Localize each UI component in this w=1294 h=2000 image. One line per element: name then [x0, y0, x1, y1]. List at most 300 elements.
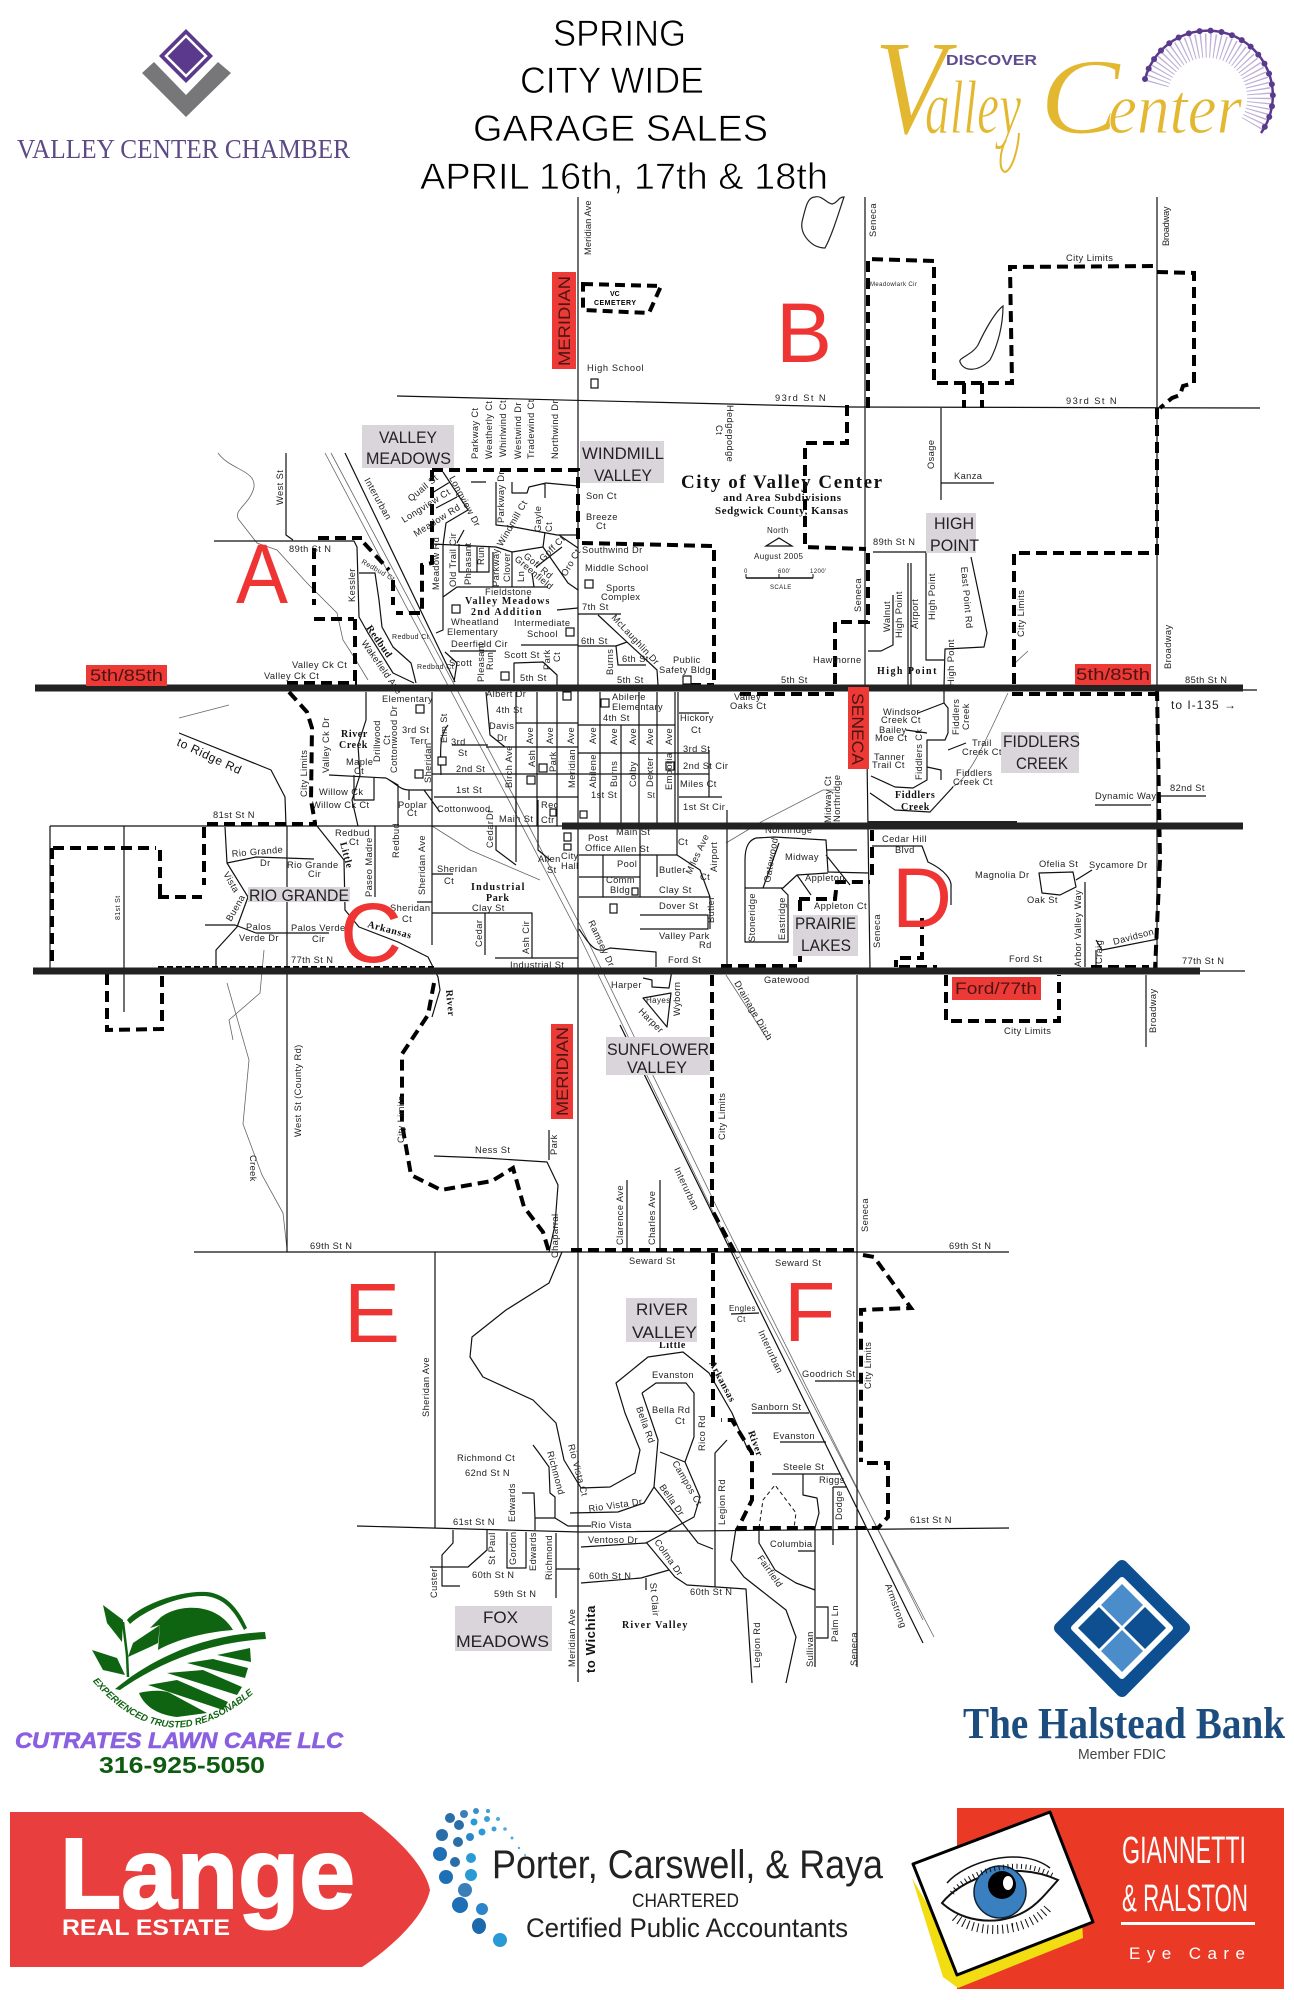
map: street labels downtown: 1st St Cir: [683, 802, 725, 812]
map: street labels east side: Trail Ct: [872, 760, 905, 770]
map: street labels downtown: Allen: [538, 854, 561, 864]
map: street labels east side: Blvd: [895, 845, 915, 855]
map: school and building icons: [415, 379, 691, 913]
map: street labels east side: Harper: [611, 980, 642, 990]
map: thick avenues: [33, 688, 1243, 971]
map: street labels east side: Wyborn: [672, 982, 682, 1016]
map: street labels east side: Creek Ct: [962, 747, 1002, 757]
map: street labels east side: Hayes: [646, 996, 671, 1005]
map: street labels south: Fairfield: [755, 1553, 785, 1589]
map: street labels south: Ct: [737, 1315, 746, 1324]
map: street labels south: 60th St N: [690, 1587, 732, 1597]
map: street labels rio grande area: Palos Verde: [291, 923, 346, 933]
map: street labels east side: Dynamic Way: [1095, 791, 1156, 801]
map: street labels downtown: Colby: [628, 761, 638, 787]
map: street labels downtown: Ford St: [668, 955, 701, 965]
map: street labels valley meadows and windmill: Middle School: [585, 563, 649, 573]
map heading: City of Valley Center: [681, 472, 883, 517]
map: street labels rio grande area: 81st St: [115, 895, 122, 920]
label: RIVER VALLEY: VALLEY: [632, 1323, 697, 1342]
map: north arrow and scale: August 2005: [754, 552, 803, 561]
logo: CutRates Lawn Care: EXPERIENCED TRUSTED REASONABLE: [92, 1678, 253, 1728]
map: street labels rio grande area: Clay St: [472, 903, 505, 913]
map: street labels valley meadows and windmill: 89th St N: [289, 544, 331, 554]
logo: Porter, Carswell, & Raya: CHARTERED: [632, 1891, 739, 1912]
logo: Valley Center Chamber: VALLEY CENTER CHAMBER: [17, 134, 350, 164]
map: street labels downtown: Ct: [678, 837, 688, 847]
map: street labels south: Legion Rd: [752, 1622, 762, 1668]
map: north arrow and scale: SCALE: [770, 585, 792, 591]
map: street labels rio grande area: Ash Cir: [521, 921, 531, 954]
map: street labels downtown: 4th St: [603, 713, 630, 723]
map: street labels south: Gordon: [508, 1532, 518, 1565]
map: street labels east side: Northridge: [765, 825, 812, 835]
map: street labels rio grande area: [115, 810, 564, 970]
map: street labels downtown: Willow Ck: [319, 787, 363, 797]
map: street labels downtown: Dover St: [659, 901, 698, 911]
section letter B: B: [776, 286, 832, 380]
map: street labels downtown: Elementary: [382, 694, 433, 704]
map: street labels downtown: Dr: [497, 733, 508, 743]
map: street labels east side: Appleton Ct: [814, 901, 867, 911]
map: street labels valley meadows and windmill: McLaughlin Dr: [610, 613, 661, 667]
map: street labels downtown: Main St: [616, 827, 650, 837]
map: street labels valley meadows and windmill: Kessler: [347, 568, 357, 602]
label: VALLEY MEADOWS: [362, 425, 454, 468]
map heading: City of Valley Center: City of Valley Center: [681, 472, 883, 493]
map: north arrow and scale: 1200': [810, 569, 826, 575]
map: street labels valley meadows and windmill: Tradewind Ct: [526, 399, 536, 459]
map: bold place names: River: [341, 729, 368, 740]
map: street labels downtown: Miles Ct: [680, 779, 717, 789]
map: street labels valley meadows and windmill: 7th St: [582, 602, 609, 612]
map: street labels valley meadows and windmill: Westwind Dr: [513, 402, 523, 459]
label: HIGH POINT: HIGH: [934, 514, 974, 533]
map: street labels downtown: Ave: [664, 728, 674, 745]
map: street labels north: 85th St N: [1185, 675, 1227, 685]
map: street labels south: Bella Rd: [634, 1405, 657, 1445]
map: street labels downtown: Sheridan: [423, 743, 433, 783]
map: street labels downtown: Ave: [545, 727, 555, 744]
map: street labels south: Interurban: [756, 1329, 785, 1375]
map: street labels south: Campos Ct: [670, 1459, 704, 1507]
map: bold place names: Arkansas: [706, 1359, 737, 1404]
map: road network: [50, 197, 1260, 1683]
section letter A: A: [236, 527, 288, 621]
map: street labels rio grande area: Vista: [221, 870, 241, 895]
logo: Discover Valley Center: DISCOVER: [946, 52, 1037, 69]
map: street labels rio grande area: Sheridan: [390, 903, 430, 913]
map: street labels valley meadows and windmill: Parkway Dr: [496, 471, 506, 523]
map: street labels rio grande area: Ct: [402, 914, 412, 924]
map: street labels downtown: 3rd: [451, 737, 466, 747]
map: street labels east side: Tanner: [874, 752, 905, 762]
logo: CutRates Lawn Care: [15, 1592, 344, 1778]
map: bold place names: Fiddlers: [895, 790, 935, 801]
map: street labels valley meadows and windmill: Parkway: [491, 549, 501, 587]
map: street labels south: 60th St N: [589, 1571, 631, 1581]
map: street labels downtown: Ct: [700, 872, 710, 882]
label: VALLEY MEADOWS: MEADOWS: [366, 449, 451, 468]
map: street labels downtown: Drillwood: [372, 720, 382, 762]
logo: Discover Valley Center: alley: [925, 66, 1021, 150]
logo: Giannetti & Ralston Eye Care: [912, 1808, 1284, 1989]
map: street labels downtown: Hickory: [680, 713, 714, 723]
map: street labels south: Evanston: [773, 1431, 815, 1441]
street tag: Meridian north: [552, 272, 576, 369]
map: street labels north: Walnut: [882, 601, 892, 632]
map: street labels south: Steele St: [783, 1462, 824, 1472]
map: street labels valley meadows and windmill: Windmill Ct: [495, 498, 529, 548]
map: street labels north: 93rd St N: [1066, 396, 1117, 406]
map: street labels north: Hawthorne: [813, 655, 862, 665]
map: street labels east side: Creek: [961, 703, 971, 730]
map: street labels east side: Moe Ct: [875, 733, 907, 743]
label: WINDMILL VALLEY: [580, 441, 664, 485]
map: street labels downtown: Butler: [659, 865, 686, 875]
map: street labels north: Seneca: [868, 203, 878, 237]
map: street labels north: Hedgepodge: [725, 405, 735, 462]
label: FOX MEADOWS: FOX: [483, 1608, 518, 1627]
map: street labels east side: Midway: [785, 852, 819, 862]
map: bold place names: to Wichita: [583, 1605, 598, 1673]
map: street labels downtown: City: [561, 851, 579, 861]
map: street labels east side: Gatewood: [764, 975, 810, 985]
map: street labels east side: Fiddlers Ck: [914, 729, 924, 780]
map: street labels downtown: Rd: [699, 940, 712, 950]
map: street labels south: Colma Dr: [652, 1537, 685, 1578]
logo: Discover Valley Center: enter: [1108, 69, 1243, 149]
map: street labels valley meadows and windmill: Safety Bldg: [659, 665, 711, 675]
map: street labels downtown: Poplar: [398, 800, 427, 810]
map: street labels rio grande area: Rio Grande: [231, 845, 284, 859]
logo: The Halstead Bank: [963, 1566, 1285, 1763]
map: street labels downtown: Ave: [588, 727, 598, 744]
map: street labels downtown: Cottonwood: [437, 804, 491, 814]
map: street labels valley meadows and windmill: Public: [673, 655, 701, 665]
map: street labels south: 61st St N: [453, 1517, 495, 1527]
map: street labels east side: 82nd St: [1170, 783, 1205, 793]
map: street labels south: West St (County Rd): [293, 1044, 303, 1137]
map: bold place names: Little: [337, 841, 355, 870]
map: street labels downtown: Dr: [485, 809, 495, 820]
logo: Valley Center Chamber: [17, 29, 350, 164]
map: street labels valley meadows and windmill: Valley Ck Ct: [292, 660, 347, 670]
map: north arrow and scale: 600': [778, 569, 791, 575]
map: north arrow and scale: [744, 526, 826, 591]
map: street labels north: 93rd St N: [775, 393, 826, 403]
map: street labels valley meadows and windmill: 6th St: [622, 654, 649, 664]
map: street labels north: 89th St N: [873, 537, 915, 547]
map: bold place names: River: [745, 1429, 765, 1458]
map: street labels east side: Seneca: [872, 914, 882, 948]
map: street labels north: City Limits: [1066, 253, 1113, 263]
label: FIDDLERS CREEK: [1001, 732, 1080, 773]
logo: CutRates Lawn Care: CUTRATES LAWN CARE LLC: [15, 1728, 344, 1753]
map: street labels downtown: Meridian: [567, 749, 577, 788]
map: street labels rio grande area: Cir: [308, 869, 321, 879]
map: street labels downtown: Valley Park: [659, 931, 710, 941]
street tag: Ford/77th: [952, 977, 1041, 1000]
map: street labels north: Seneca: [853, 578, 863, 612]
map: bold place names: Industrial: [471, 882, 525, 893]
map: street labels east side: Craig: [1094, 940, 1104, 964]
map: street labels south: City Limits: [717, 1093, 727, 1140]
map: street labels north: Broadway: [1161, 206, 1171, 246]
map: street labels south: 60th St N: [472, 1570, 514, 1580]
map: street labels downtown: Valley: [734, 692, 761, 702]
map: street labels downtown: Cottonwood Dr: [389, 706, 399, 773]
map: street labels valley meadows and windmill: Run: [476, 547, 486, 565]
logo: Giannetti & Ralston Eye Care: Eye Care: [1129, 1944, 1245, 1963]
map: street labels valley meadows and windmill: Redbud Ct: [360, 559, 396, 583]
label: PRAIRIE LAKES: [793, 914, 858, 956]
map: street labels downtown: Birch Ave: [504, 745, 514, 788]
map: street labels valley meadows and windmill: Park: [542, 649, 552, 670]
map: street labels south: 59th St N: [494, 1589, 536, 1599]
map: street labels downtown: Oaks Ct: [730, 701, 766, 711]
map: street labels valley meadows and windmill: Old Trail Cir: [448, 533, 458, 587]
map: street labels downtown: Maple: [346, 757, 373, 767]
logo: Discover Valley Center: C: [1040, 38, 1122, 157]
map: street labels downtown: 3rd St: [402, 725, 429, 735]
map: street labels south: Charles Ave: [647, 1191, 657, 1245]
map: street labels downtown: Ctr: [541, 815, 555, 825]
map: street labels downtown: Valley Ck Dr: [321, 717, 331, 773]
map: street labels south: Goodrich St: [802, 1369, 856, 1379]
map: street labels east side: Midway Ct: [823, 776, 833, 823]
map: street labels north: Broadway: [1163, 624, 1173, 669]
map: street labels downtown: Terr: [410, 736, 428, 746]
map: street labels downtown: City Limits: [299, 750, 309, 797]
label: RIVER VALLEY: [626, 1298, 697, 1342]
map: street labels downtown: Hall: [561, 861, 579, 871]
map: street labels rio grande area: Dr: [260, 858, 271, 868]
map: street labels east side: Stoneridge: [747, 893, 757, 942]
map: street labels downtown: Clay St: [659, 885, 692, 895]
logo: Discover Valley Center: V: [874, 14, 958, 163]
map: street labels valley meadows and windmill: Interurban: [362, 476, 393, 522]
map: street labels downtown: Ave: [628, 728, 638, 745]
map: street labels south: St Clair: [648, 1582, 661, 1617]
map: street labels rio grande area: Sheridan: [437, 864, 477, 874]
map: street labels valley meadows and windmill: Redbud Ct: [417, 664, 454, 671]
map: street labels north: High Point: [927, 573, 937, 620]
map: street labels east side: Appleton: [805, 873, 845, 883]
map: street labels south: Palm Ln: [830, 1605, 840, 1642]
map: street labels valley meadows and windmill: Ct: [552, 652, 562, 662]
map: street labels east side: Eastridge: [777, 897, 787, 940]
map: street labels valley meadows and windmill: Pleasant: [476, 643, 486, 682]
map: street labels east side: Oak St: [1027, 895, 1058, 905]
map: street labels downtown: Elementary: [612, 702, 663, 712]
map: street labels valley meadows and windmill: Pheasant: [463, 542, 473, 585]
map: street labels valley meadows and windmill: Redbud Ct: [392, 634, 429, 641]
map: street labels south: Meridian Ave: [567, 1609, 577, 1667]
map: street labels valley meadows and windmill: Ct: [544, 522, 554, 532]
map: bold place names: River Valley: [622, 1620, 688, 1631]
map: street labels valley meadows and windmill: Meadow Rd: [431, 537, 441, 590]
map: street labels downtown: Airport: [709, 842, 719, 872]
map: street labels east side: Fiddlers: [951, 699, 961, 735]
map: street labels valley meadows and windmill: School: [527, 629, 558, 639]
map: street labels south: Riggs: [819, 1475, 845, 1485]
map: street labels valley meadows and windmill: Meadow Rd: [412, 502, 462, 539]
map: street labels south: Ness St: [475, 1145, 510, 1155]
map: street labels south: 69th St N: [949, 1241, 991, 1251]
map: street labels downtown: Pool: [617, 859, 637, 869]
map: street labels downtown: Allen St: [614, 844, 649, 854]
map: street labels valley meadows and windmill: Northwind Dr: [550, 400, 560, 459]
map: street labels south: Bella Dr: [657, 1482, 686, 1518]
map: city limits dashed boundary: [52, 259, 1194, 1528]
map: street labels valley meadows and windmill: Sports: [606, 583, 635, 593]
map: street labels downtown: Albert Dr: [486, 689, 526, 699]
map: street labels downtown: Bldg: [610, 885, 630, 895]
map: street labels downtown: [299, 689, 766, 968]
label: RIO GRANDE: RIO GRANDE: [249, 886, 349, 905]
map: street labels downtown: Abilene: [588, 754, 598, 788]
map: bold place names: Arkansas: [366, 919, 413, 942]
map: street labels north: City Limits: [1016, 590, 1026, 637]
label: RIVER VALLEY: RIVER: [636, 1300, 688, 1319]
map: street labels south: Seward St: [629, 1256, 676, 1266]
map: street labels downtown: 1st St: [591, 790, 617, 800]
map: street labels valley meadows and windmill: Complex: [601, 592, 640, 602]
map: street labels south: Seneca: [860, 1198, 870, 1232]
map: street labels rio grande area: 77th St N: [291, 955, 333, 965]
map: street labels rio grande area: Redbud: [335, 828, 370, 838]
map: bold place names: 2nd Addition: [471, 607, 542, 618]
logo: Lange Real Estate: Lange: [60, 1818, 355, 1930]
map: street labels valley meadows and windmill: Clover: [502, 553, 512, 582]
map: street labels valley meadows and windmill: Parkway Ct: [470, 407, 480, 459]
map: street labels rio grande area: Verde Dr: [239, 933, 279, 943]
map: street labels east side: Windsor: [883, 707, 920, 717]
map: street labels valley meadows and windmill: Ln: [516, 571, 526, 582]
cemetery: CEMETERY: [594, 300, 636, 307]
map: street labels downtown: Dexter: [645, 757, 655, 787]
map: street labels east side: City Limits: [1004, 1026, 1051, 1036]
map: street labels south: 61st St N: [910, 1515, 952, 1525]
label: SUNFLOWER VALLEY: [606, 1037, 710, 1077]
map: street labels east side: Drainage Ditch: [732, 979, 774, 1042]
map: street labels south: Dodge: [834, 1491, 844, 1520]
map: street labels downtown: Ave: [645, 728, 655, 745]
map: ponds: [802, 197, 1003, 369]
map: street labels downtown: Butler: [706, 896, 716, 923]
title: [420, 13, 828, 197]
label: PRAIRIE LAKES: PRAIRIE: [795, 914, 856, 933]
map: street labels south: Columbia: [770, 1539, 813, 1549]
map: street labels downtown: Comm: [606, 875, 635, 885]
map: street labels downtown: Main St: [499, 814, 533, 824]
logo: Porter, Carswell, & Raya: Certified Public Accountants: [526, 1913, 848, 1943]
map: street labels south: Park: [549, 1134, 559, 1155]
map: street labels south: Sheridan Ave: [421, 1357, 431, 1417]
logo: CutRates Lawn Care: 316-925-5050: [99, 1752, 265, 1778]
map: street labels valley meadows and windmill: Valley Ck Ct: [264, 671, 319, 681]
map: street labels east side: Sycamore Dr: [1089, 860, 1148, 870]
map: street labels valley meadows and windmill: Southwind Dr: [582, 545, 643, 555]
map: street labels valley meadows and windmill: Ct: [596, 521, 606, 531]
cemetery: [583, 284, 661, 313]
section letter D: D: [892, 851, 952, 945]
map: street labels north: Kanza: [954, 471, 983, 481]
map: street labels valley meadows and windmill: Weatherly Ct: [484, 401, 494, 459]
map: thin road extensions: [1200, 690, 1257, 971]
map: street labels downtown: Ramsey Dr: [586, 919, 616, 968]
logo: Porter, Carswell, & Raya: Porter, Carswell, & Raya: [492, 1843, 884, 1887]
map: street labels valley meadows and windmill: Burns: [605, 649, 615, 675]
map: bold place names: [175, 596, 937, 1673]
map: street labels valley meadows and windmill: Run: [485, 652, 495, 670]
map: street labels downtown: 2nd St Cir: [683, 761, 728, 771]
map: street labels valley meadows and windmill: Quail St: [406, 473, 440, 504]
map: street labels rio grande area: Rio Grande: [287, 860, 339, 870]
map: street labels south: Richmond Ct: [457, 1453, 515, 1463]
map: street labels downtown: Ct: [691, 725, 701, 735]
map: street labels valley meadows and windmill: Son Ct: [586, 491, 617, 501]
label: VALLEY MEADOWS: VALLEY: [379, 428, 437, 447]
map: street labels valley meadows and windmill: West St: [275, 470, 285, 505]
map: bold place names: Redbud: [364, 623, 394, 660]
map: street labels downtown: Ct: [354, 766, 364, 776]
map: street labels downtown: Willow Ck Ct: [312, 800, 369, 810]
map: street labels east side: Gatewood: [762, 837, 780, 883]
map: street labels north: Meridian Ave: [583, 200, 593, 255]
section letter C: C: [340, 886, 402, 980]
map: street labels downtown: Burns: [609, 761, 619, 787]
map: street labels valley meadows and windmill: 5th St: [520, 673, 547, 683]
map: street labels east side: Harper: [637, 1006, 665, 1035]
map: street labels north: Osage: [926, 440, 936, 469]
map: street labels south: Interurban: [672, 1166, 701, 1212]
logo: Lange Real Estate: REAL ESTATE: [62, 1915, 230, 1940]
map: street labels east side: Creek Ct: [881, 715, 921, 725]
map: street labels rio grande area: Buena: [224, 893, 247, 923]
map: street labels east side: Creek Ct: [953, 777, 993, 787]
cemetery: VC: [610, 291, 620, 298]
map: street labels south: Custer: [429, 1568, 439, 1598]
map: street labels south: Evanston: [652, 1370, 694, 1380]
street tag: 5th/85th left: 5th/85th: [90, 666, 163, 685]
map: street labels south: Rico Rd: [697, 1415, 707, 1451]
map: street labels south: Creek: [248, 1155, 258, 1182]
map: street labels south: Clarence Ave: [615, 1185, 625, 1245]
map: street labels downtown: St: [458, 748, 468, 758]
map: street labels north: Ct: [714, 425, 724, 435]
street tag: 5th/85th left: [86, 665, 167, 686]
map: bold place names: Little: [659, 1340, 686, 1351]
map: street labels north: [583, 200, 1237, 712]
label: HIGH POINT: [926, 513, 979, 555]
map: street labels valley meadows and windmill: Goff Ct: [537, 534, 567, 563]
map: street labels rio grande area: Sheridan Ave: [417, 835, 427, 895]
map: street labels downtown: Davis: [489, 721, 514, 731]
map: street labels south: Engles: [729, 1304, 756, 1313]
map: street labels valley meadows and windmill: [264, 399, 711, 696]
map: street labels east side: Cedar Hill: [882, 834, 927, 844]
map: street labels south: Richmond: [545, 1450, 566, 1496]
map: street labels north: High School: [587, 363, 644, 373]
map: street labels downtown: Ave: [525, 727, 535, 744]
label: FOX MEADOWS: MEADOWS: [456, 1632, 549, 1651]
map: street labels south: 62nd St N: [465, 1468, 510, 1478]
map: street labels downtown: 4th St: [496, 705, 523, 715]
label: FOX MEADOWS: [455, 1606, 552, 1651]
map: street labels downtown: Ave: [566, 727, 576, 744]
